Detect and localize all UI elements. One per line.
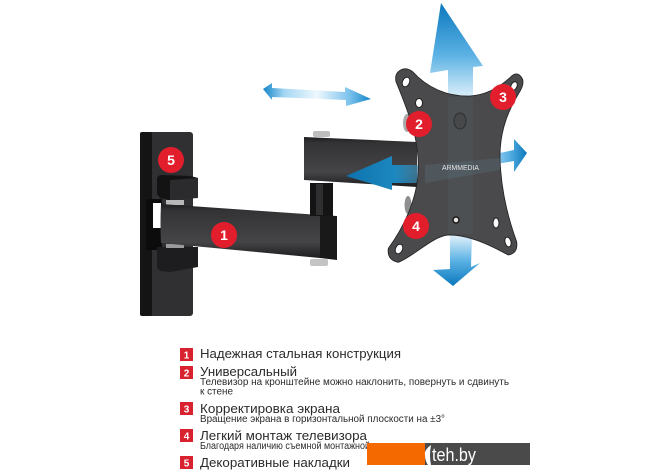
legend item 3: 3	[184, 404, 190, 416]
screw hole	[453, 217, 459, 223]
badge 2: 2	[415, 116, 423, 132]
badge 3: 3	[499, 89, 507, 105]
lower arm	[160, 200, 337, 266]
legend item 5: 5	[184, 458, 190, 470]
badge 5: 5	[167, 152, 175, 168]
badge 4: 4	[412, 218, 420, 234]
watermark teh.by	[367, 443, 530, 465]
legend item 1: Надежная стальная конструкция	[200, 346, 401, 361]
upper arm	[304, 131, 417, 187]
arrow right	[480, 139, 527, 172]
VESA mounting plate	[388, 69, 523, 262]
legend	[180, 346, 509, 470]
double horizontal arrow	[263, 83, 371, 106]
legend item 4	[180, 428, 370, 452]
watermark teh.by: teh.by	[432, 445, 476, 465]
arrow up	[430, 3, 483, 98]
upper decorative cover	[157, 175, 198, 200]
legend item 5: Декоративные накладки	[200, 455, 350, 470]
legend item 2	[180, 364, 509, 398]
badge 4	[403, 213, 429, 239]
left arrow	[346, 156, 445, 190]
badge 3	[490, 84, 516, 110]
legend item 2: Универсальный	[200, 364, 297, 379]
legend item 3: Корректировка экрана	[200, 401, 341, 416]
badge 1: 1	[220, 227, 228, 243]
legend item 1: 1	[184, 350, 190, 362]
plate hinge bolts	[403, 114, 412, 214]
badge 5	[158, 147, 184, 173]
legend item 3	[180, 401, 445, 425]
centre recess	[454, 113, 466, 129]
legend item 4: Легкий монтаж телевизора	[200, 428, 368, 443]
legend item 2: 2	[184, 368, 190, 380]
plate holes	[394, 76, 519, 255]
badge 1	[211, 222, 237, 248]
legend item 2: Телевизор на кронштейне можно наклонить, повернуть и сдвинуть	[200, 377, 509, 388]
pivot post	[310, 183, 333, 216]
badge 2	[406, 111, 432, 137]
legend item 4: Благодаря наличию съемной монтажной	[200, 441, 370, 452]
arrow down	[433, 235, 480, 286]
wall plate	[140, 132, 193, 316]
brand label: ARMMEDIA	[442, 163, 479, 172]
lower decorative cover	[157, 247, 198, 272]
legend item 4: 4	[184, 432, 190, 442]
legend item 3: Вращение экрана в горизонтальной плоскости на ±3°	[200, 414, 445, 425]
legend item 2: к стене	[200, 386, 233, 398]
